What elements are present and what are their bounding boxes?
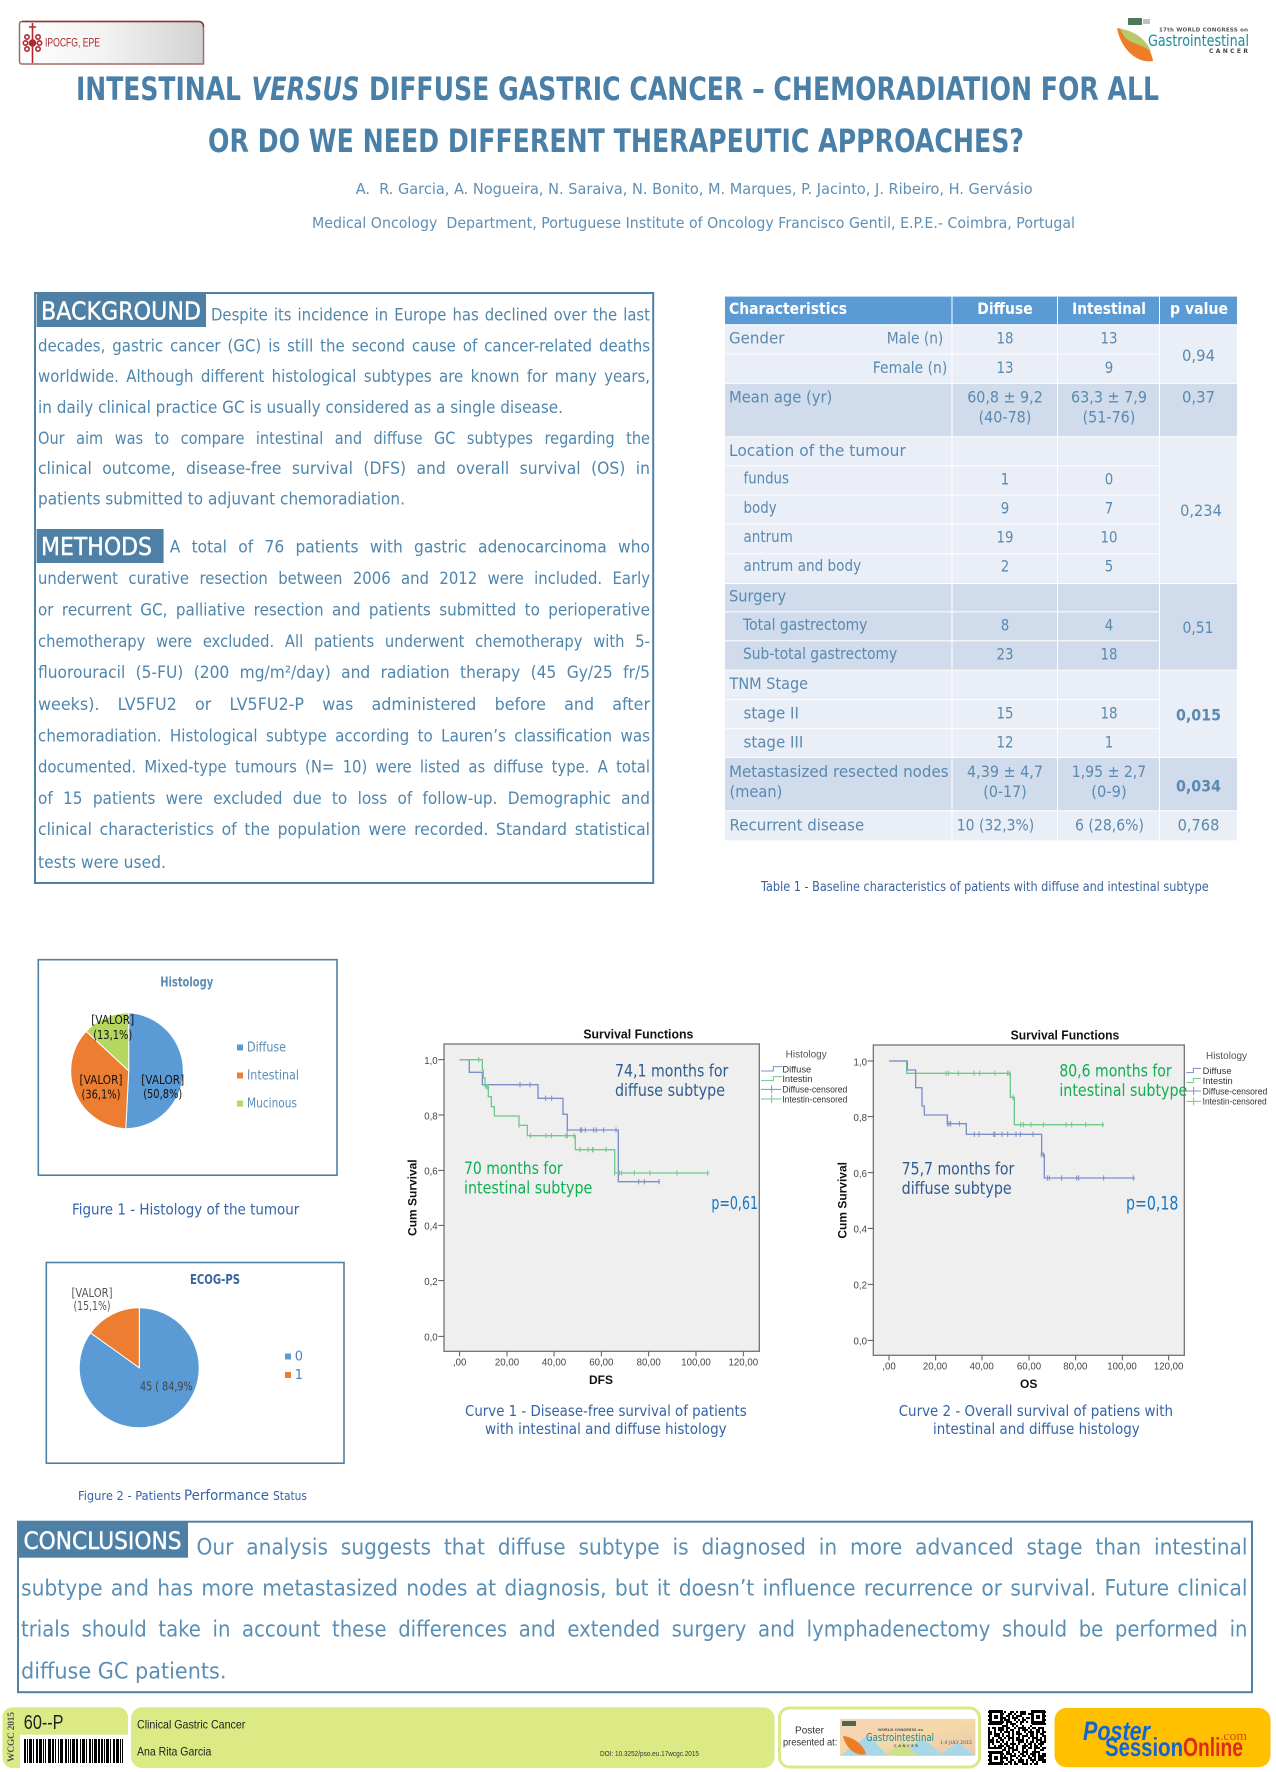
caption: figure 2: Figure 2 - Patients <box>78 1489 181 1503</box>
text block: methods: chemotherapy were excluded. All patients underwent chemotherapy with 5- <box>38 632 650 652</box>
curve: intestinal <box>889 1061 1104 1127</box>
table column: intestinal: 63,3 ± 7,9 <box>1071 387 1147 406</box>
legend: Diffuse-censored <box>782 1085 847 1095</box>
caption: curve 2: Curve 2 - Overall survival of patiens with <box>899 1402 1173 1420</box>
legend: ECOG-PS: 1 <box>295 1368 303 1383</box>
x axis labels: 60,00 <box>1017 1361 1041 1372</box>
legend: Intestin <box>782 1074 812 1084</box>
legend: histology: Mucinous <box>247 1096 297 1112</box>
table column: intestinal: 13 <box>1100 328 1118 348</box>
annotation: diffuse median: diffuse subtype <box>902 1179 1012 1198</box>
text block: methods: weeks). LV5FU2 or LV5FU2-P was administered before and after <box>38 695 650 715</box>
text block: background: Our aim was to compare intestinal and diffuse GC subtypes regarding the <box>38 429 650 449</box>
x axis labels: ,00 <box>453 1357 466 1368</box>
pie labels: ECOG-PS: (15,1%) <box>74 1299 110 1313</box>
y axis labels: 0,2 <box>424 1277 438 1288</box>
table row labels: Total gastrectomy <box>742 615 867 634</box>
table header <box>729 299 1228 318</box>
caption: figure 2: Status <box>273 1489 307 1503</box>
y axis labels: 0,8 <box>854 1113 867 1124</box>
table column: diffuse: 13 <box>996 358 1014 377</box>
table column: diffuse: 18 <box>996 328 1014 348</box>
table column: intestinal: 5 <box>1105 556 1113 576</box>
pie labels: histology <box>80 1013 184 1102</box>
table row labels: Surgery <box>729 587 786 606</box>
table column: intestinal: 4 <box>1105 616 1113 634</box>
pie labels: histology: (36,1%) <box>82 1088 120 1102</box>
table column: intestinal: 6 (28,6%) <box>1075 816 1144 834</box>
x axis labels: 40,00 <box>542 1357 566 1368</box>
table header: p value <box>1170 299 1228 318</box>
x axis title: DFS <box>589 1373 613 1387</box>
table column: intestinal: 1,95 ± 2,7 <box>1072 762 1146 781</box>
table row labels: TNM Stage <box>729 674 808 693</box>
table column: p value: 0,015 <box>1176 706 1221 724</box>
logo: World Congress on Gastrointestinal Cancer: CANCER <box>1209 48 1248 55</box>
table column: intestinal: 0 <box>1105 470 1113 488</box>
x axis labels: 120,00 <box>1154 1361 1183 1372</box>
table column: intestinal: (0-9) <box>1091 782 1127 801</box>
caption: curve 1: Curve 1 - Disease-free survival of patients <box>465 1402 747 1420</box>
footer: session and author: DOI: 10.3252/pso.eu.17wcgc.2015 <box>600 1749 699 1758</box>
footer: poster id and barcode: 60--P <box>24 1712 64 1734</box>
pie: histology <box>71 1013 183 1129</box>
legend: Intestin <box>1203 1076 1233 1086</box>
y axis labels: 0,8 <box>424 1111 438 1122</box>
congress banner: Gastrointestinal <box>866 1731 934 1744</box>
x axis labels: 100,00 <box>681 1357 711 1368</box>
table row labels: Location of the tumour <box>729 441 906 460</box>
table row labels: Recurrent disease <box>730 816 864 834</box>
footer: poster presented at: presented at: <box>783 1738 837 1749</box>
chart title: ECOG-PS: ECOG-PS <box>190 1273 240 1288</box>
legend: Intestin-censored <box>1203 1097 1267 1107</box>
text block: methods: tests were used. <box>38 853 166 873</box>
table row labels: antrum and body <box>744 556 861 575</box>
legend: Intestin-censored <box>782 1094 847 1104</box>
table column: diffuse: 1 <box>1001 470 1009 488</box>
title: INTESTINAL <box>76 70 241 108</box>
table column: diffuse: (40-78) <box>979 408 1031 426</box>
y axis labels: 0,6 <box>424 1167 438 1178</box>
table row labels: Female (n) <box>873 358 947 377</box>
congress banner: 1-4 JULY 2015 <box>940 1740 972 1746</box>
table column: intestinal: 10 <box>1100 528 1118 546</box>
logo: World Congress on Gastrointestinal Cancer <box>1117 18 1249 61</box>
text block: methods <box>38 538 650 873</box>
annotation: intestinal median <box>1059 1061 1187 1100</box>
text block: background: in daily clinical practice GC is usually considered as a single disease. <box>38 398 563 418</box>
x axis labels: 100,00 <box>1107 1361 1137 1372</box>
table row labels: stage III <box>744 733 803 752</box>
legend: histology: Diffuse <box>247 1040 286 1056</box>
table column: intestinal: (51-76) <box>1083 408 1135 426</box>
text block: methods: chemoradiation. Histological subtype according to Lauren’s classification was <box>38 726 650 746</box>
caption: curve 1: with intestinal and diffuse histology <box>485 1420 727 1438</box>
table column: diffuse: 19 <box>996 528 1014 546</box>
y axis labels: 0,0 <box>854 1337 867 1348</box>
panel: histology pie chart <box>38 960 337 1175</box>
caption: curve 1 <box>465 1402 747 1438</box>
pie labels: histology: (13,1%) <box>93 1028 132 1042</box>
logo: World Congress on Gastrointestinal Cancer: 17th WORLD CONGRESS on <box>1159 28 1248 34</box>
caption: curve 2: intestinal and diffuse histology <box>933 1420 1140 1438</box>
table column: p value: 0,94 <box>1182 346 1215 365</box>
text block: background: decades, gastric cancer (GC) is still the second cause of cancer-related deaths <box>38 336 650 356</box>
congress banner: WORLD CONGRESS on <box>878 1728 924 1732</box>
x axis labels <box>453 1357 758 1368</box>
y axis labels: 0,0 <box>424 1333 438 1344</box>
pie labels: histology: (50,8%) <box>143 1087 182 1101</box>
curve: diffuse <box>889 1061 1135 1181</box>
legend <box>761 1050 847 1104</box>
legend: ECOG-PS <box>285 1350 303 1383</box>
x axis labels: 80,00 <box>1063 1361 1087 1372</box>
chart: overall survival curve <box>836 1028 1267 1391</box>
plot area <box>873 1045 1184 1355</box>
table column: intestinal: 18 <box>1100 704 1118 722</box>
y axis labels: 0,2 <box>854 1281 867 1292</box>
text block: methods: of 15 patients were excluded due to loss of follow-up. Demographic and <box>38 789 650 809</box>
table row labels: Gender <box>729 328 785 348</box>
curve: diffuse <box>460 1060 660 1184</box>
y axis labels <box>424 1056 438 1344</box>
table column: p value: 0,51 <box>1182 618 1214 637</box>
title: VERSUS <box>252 70 360 108</box>
affiliation: Medical Oncology Department, Portuguese Institute of Oncology Francisco Gentil, E.P.E.- Coimbra, Portugal <box>312 214 1075 232</box>
table column: diffuse: 12 <box>996 733 1014 752</box>
table row labels: stage II <box>744 704 799 722</box>
legend: ECOG-PS: 0 <box>295 1350 303 1364</box>
annotation: diffuse median: diffuse subtype <box>615 1081 725 1100</box>
logo: PosterSessionOnline <box>1054 1708 1270 1767</box>
x axis labels: ,00 <box>882 1361 896 1372</box>
annotation: intestinal median: 70 months for <box>464 1159 563 1178</box>
pie labels: ECOG-PS: [VALOR] <box>72 1286 112 1300</box>
text block: methods: clinical characteristics of the population were recorded. Standard statistical <box>38 820 650 840</box>
legend: histology: Intestinal <box>247 1068 299 1084</box>
table column: diffuse: (0-17) <box>983 782 1027 801</box>
table column: diffuse: 60,8 ± 9,2 <box>967 387 1043 406</box>
annotation: intestinal median: intestinal subtype <box>1059 1081 1187 1100</box>
text block: methods: A total of 76 patients with gastric adenocarcinoma who <box>170 538 650 558</box>
pie: ECOG-PS <box>79 1308 199 1428</box>
annotation: diffuse median: 74,1 months for <box>615 1061 728 1080</box>
pie labels: ECOG-PS <box>72 1286 193 1394</box>
table column: intestinal: 18 <box>1100 644 1118 664</box>
heading: methods: METHODS <box>41 532 152 561</box>
x axis labels: 20,00 <box>495 1357 519 1368</box>
legend: Diffuse-censored <box>1203 1087 1267 1097</box>
table: baseline characteristics <box>725 297 1237 840</box>
text block: methods: or recurrent GC, palliative resection and patients submitted to perioperative <box>38 600 650 620</box>
footer: session and author: Ana Rita Garcia <box>137 1744 212 1758</box>
table header: Intestinal <box>1072 299 1146 318</box>
table row labels: fundus <box>744 469 789 488</box>
table row labels <box>729 328 949 834</box>
plot area <box>444 1044 759 1351</box>
table row labels: (mean) <box>730 782 782 801</box>
table column: diffuse: 2 <box>1001 556 1009 576</box>
annotation: p value: p=0,18 <box>1126 1194 1178 1215</box>
table row labels: Metastasized resected nodes <box>729 762 949 781</box>
logo: PosterSessionOnline: .com <box>1220 1728 1247 1743</box>
x axis labels: 120,00 <box>729 1357 758 1368</box>
table column: intestinal <box>1071 328 1147 834</box>
text block: methods: underwent curative resection between 2006 and 2012 were included. Early <box>38 569 650 589</box>
table column: p value: 0,034 <box>1176 776 1221 795</box>
panel: ECOG-PS pie chart <box>46 1262 344 1463</box>
text block: methods: fluorouracil (5-FU) (200 mg/m²/day) and radiation therapy (45 Gy/25 fr/5 <box>38 663 650 683</box>
y axis labels: 1,0 <box>424 1056 438 1067</box>
y axis labels: 0,6 <box>854 1169 867 1180</box>
table header: Characteristics <box>729 299 847 318</box>
table row labels: antrum <box>744 527 793 546</box>
table column: diffuse: 4,39 ± 4,7 <box>967 762 1043 781</box>
text block: background: Despite its incidence in Europe has declined over the last <box>211 306 650 326</box>
x axis labels <box>882 1361 1183 1372</box>
caption: curve 2 <box>899 1402 1173 1438</box>
annotation: intestinal median: intestinal subtype <box>464 1178 592 1197</box>
text block: conclusions <box>21 1535 1248 1684</box>
congress banner: CANCER <box>894 1744 918 1748</box>
table column: diffuse: 15 <box>996 704 1014 722</box>
pie labels: histology: [VALOR] <box>91 1013 134 1027</box>
caption: figure 1: Figure 1 - Histology of the tumour <box>72 1200 300 1218</box>
table header: Diffuse <box>977 299 1033 318</box>
pie labels: ECOG-PS: 45 ( 84,9% <box>140 1380 193 1394</box>
y axis title: Cum Survival <box>406 1159 420 1236</box>
footer: session and author <box>131 1707 774 1768</box>
y axis labels <box>854 1057 868 1348</box>
footer: session and author: Clinical Gastric Cancer <box>137 1717 245 1731</box>
y axis labels: 1,0 <box>854 1057 867 1068</box>
caption: figure 2 <box>78 1488 307 1504</box>
text block: background: clinical outcome, disease-free survival (DFS) and overall survival (OS) in <box>38 459 650 479</box>
table column: p value: 0,768 <box>1178 816 1219 834</box>
y axis labels: 0,4 <box>424 1222 438 1233</box>
x axis labels: 20,00 <box>923 1361 947 1372</box>
table row labels: Sub-total gastrectomy <box>743 644 897 663</box>
panel: conclusions <box>18 1522 1252 1692</box>
logo: IPOCFG, EPE <box>20 22 204 64</box>
chart: disease-free survival curve <box>406 1027 847 1387</box>
text block: background: patients submitted to adjuvant chemoradiation. <box>38 490 405 510</box>
text block: background: worldwide. Although different histological subtypes are known for many years, <box>38 367 650 387</box>
authors: A. R. Garcia, A. Nogueira, N. Saraiva, N. Bonito, M. Marques, P. Jacinto, J. Ribeiro, H. Gervásio <box>356 180 1033 198</box>
footer: poster id and barcode <box>2 1707 128 1768</box>
title <box>76 70 1159 160</box>
text block: conclusions: diffuse GC patients. <box>21 1659 226 1684</box>
heading: background: BACKGROUND <box>41 296 201 326</box>
curve: intestinal <box>460 1057 709 1176</box>
logo: PosterSessionOnline: Poster <box>1083 1716 1151 1746</box>
annotation: diffuse median <box>902 1160 1014 1198</box>
table column: diffuse <box>957 328 1043 834</box>
annotation: p value: p=0,61 <box>711 1194 758 1214</box>
y axis labels: 0,4 <box>854 1225 868 1236</box>
table column: p value <box>1176 346 1222 834</box>
table row labels: Male (n) <box>887 328 943 348</box>
footer: poster presented at <box>780 1708 980 1767</box>
annotation: diffuse median <box>615 1061 728 1100</box>
logo: PosterSessionOnline: Session <box>1105 1732 1183 1762</box>
icon: QR code <box>988 1712 1046 1764</box>
annotation: diffuse median: 75,7 months for <box>902 1160 1014 1179</box>
axes ticks <box>438 1060 743 1356</box>
title: OR DO WE NEED DIFFERENT THERAPEUTIC APPROACHES? <box>208 122 1024 160</box>
pie labels: histology: [VALOR] <box>80 1073 122 1087</box>
table column: intestinal: 7 <box>1105 498 1113 518</box>
x axis labels: 60,00 <box>589 1357 613 1368</box>
text block: methods: documented. Mixed-type tumours (N= 10) were listed as diffuse type. A total <box>38 758 650 778</box>
table column: p value: 0,234 <box>1180 501 1222 520</box>
table row labels: body <box>744 498 777 517</box>
table column: intestinal: 9 <box>1105 358 1113 377</box>
heading: conclusions: CONCLUSIONS <box>24 1527 182 1555</box>
table caption: Table 1 - Baseline characteristics of patients with diffuse and intestinal subtype <box>760 880 1209 895</box>
footer: poster presented at: Poster <box>795 1726 825 1737</box>
y axis title: Cum Survival <box>836 1162 850 1239</box>
panel: background and methods <box>35 293 653 883</box>
chart title: Survival Functions <box>583 1027 693 1041</box>
logo: IPOCFG, EPE: IPOCFG, EPE <box>45 36 100 50</box>
axes ticks <box>868 1061 1169 1360</box>
annotation: intestinal median: 80,6 months for <box>1059 1061 1172 1080</box>
table column: p value: 0,37 <box>1182 387 1215 406</box>
x axis labels: 80,00 <box>637 1357 661 1368</box>
logo: World Congress on Gastrointestinal Cancer: Gastrointestinal <box>1148 31 1249 50</box>
chart title: Survival Functions <box>1011 1028 1119 1042</box>
legend: Diffuse <box>782 1064 811 1074</box>
text block: background <box>38 306 650 510</box>
annotation: intestinal median <box>464 1159 592 1197</box>
legend <box>1186 1051 1267 1107</box>
table column: diffuse: 23 <box>996 644 1014 664</box>
x axis labels: 40,00 <box>970 1361 994 1372</box>
footer: poster id and barcode: WCGC 2015 <box>7 1712 17 1762</box>
table row labels: Mean age (yr) <box>729 387 832 406</box>
legend: Histology <box>1206 1051 1247 1062</box>
logo: PosterSessionOnline: Online <box>1183 1732 1243 1762</box>
legend: Histology <box>786 1050 827 1061</box>
table column: intestinal: 1 <box>1105 733 1113 752</box>
x axis title: OS <box>1020 1377 1037 1391</box>
caption: figure 2: Performance <box>184 1488 269 1504</box>
legend: histology <box>237 1040 299 1112</box>
table column: diffuse: 9 <box>1001 498 1009 518</box>
pie labels: histology: [VALOR] <box>141 1073 184 1087</box>
congress banner <box>840 1719 975 1756</box>
table column: diffuse: 10 (32,3%) <box>957 816 1034 834</box>
legend: Diffuse <box>1203 1066 1232 1076</box>
table column: diffuse: 8 <box>1001 616 1009 634</box>
chart title: histology: Histology <box>160 976 214 990</box>
